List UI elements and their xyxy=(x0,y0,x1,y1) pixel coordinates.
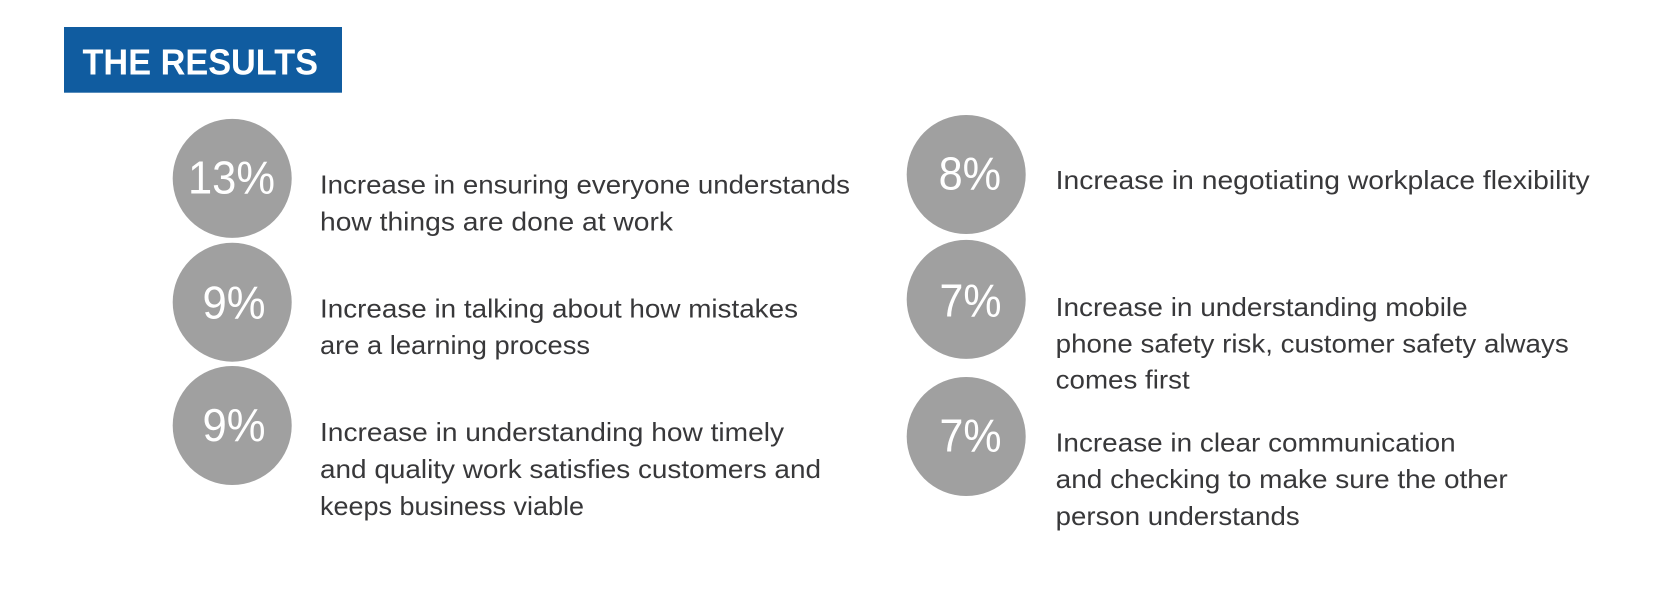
description: 7% mobile phone xyxy=(1056,292,1569,394)
heading banner: THE RESULTS xyxy=(64,27,342,93)
description: 7% communication: Increase in clear communication xyxy=(1056,428,1456,458)
stat circle: 7% xyxy=(907,377,1026,496)
stat circle: 8%: 8% xyxy=(939,147,1001,199)
result item: 8% workplace flexibility xyxy=(907,115,1590,234)
result item: 7% mobile phone safety xyxy=(907,240,1569,394)
stat circle: 7% xyxy=(907,240,1026,359)
result item: 7% clear communication xyxy=(907,377,1508,531)
stat circle: 13% xyxy=(173,119,292,238)
stat circle: 7%: 7% xyxy=(940,409,1002,461)
stat circle: 9%: 9% xyxy=(202,399,266,451)
stat circle: 7%: 7% xyxy=(940,274,1002,326)
description: 9% timely work: keeps business viable xyxy=(320,491,584,521)
result item: 13% xyxy=(173,119,850,238)
description: 7% communication: person understands xyxy=(1056,501,1300,531)
description: 13% xyxy=(320,170,850,236)
stat circle: 13%: 13% xyxy=(188,151,275,203)
description: 7% mobile phone: comes first xyxy=(1056,364,1191,394)
result item: 9% talking about mistakes xyxy=(173,243,798,362)
description: 13%: how things are done at work xyxy=(320,206,674,236)
description: 9% timely work: and quality work satisfies customers and xyxy=(320,454,821,484)
result item: 9% timely and quality work xyxy=(173,366,821,521)
description: 9% mistakes xyxy=(320,294,798,360)
description: 9% timely work xyxy=(320,417,821,521)
description: 7% communication: and checking to make sure the other xyxy=(1056,464,1508,494)
description: 9% timely work: Increase in understanding how timely xyxy=(320,417,784,447)
stat circle: 9% xyxy=(173,366,292,485)
description: 13%: Increase in ensuring everyone understands xyxy=(320,170,850,200)
stat circle: 9% xyxy=(173,243,292,362)
description: 9% mistakes: Increase in talking about how mistakes xyxy=(320,294,798,324)
description: 7% communication xyxy=(1056,428,1508,531)
description: 9% mistakes: are a learning process xyxy=(320,330,590,360)
description: 7% mobile phone: phone safety risk, customer safety always xyxy=(1056,328,1569,358)
description: 8%: Increase in negotiating workplace flexibility xyxy=(1056,165,1590,195)
stat circle: 9%: 9% xyxy=(202,276,266,328)
description: 7% mobile phone: Increase in understanding mobile xyxy=(1056,292,1468,322)
heading banner: THE RESULTS: THE RESULTS xyxy=(82,42,318,82)
stat circle: 8% xyxy=(907,115,1026,234)
